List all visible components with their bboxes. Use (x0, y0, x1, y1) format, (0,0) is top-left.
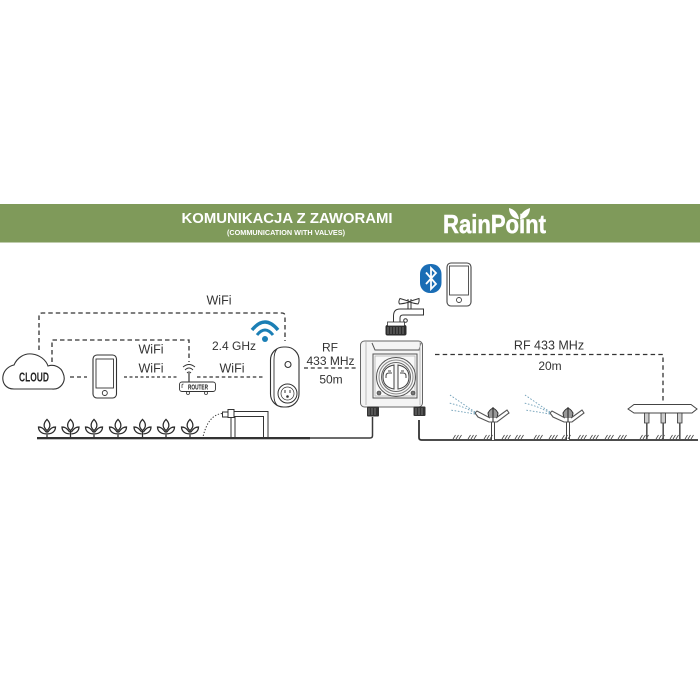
label: 20m: 20m (538, 359, 562, 373)
arrow: cloud to plug WiFi link (39, 313, 285, 350)
sprinkler one (449, 395, 509, 440)
sprinkler two (524, 395, 584, 440)
plants row (38, 419, 198, 437)
icon: cloud: CLOUD (19, 370, 49, 384)
icon: cloud (3, 354, 64, 389)
icon: phone (93, 355, 116, 398)
heading: title: KOMUNIKACJA Z ZAWORAMI (182, 211, 392, 227)
icon: two-way valve body (360, 341, 422, 407)
icon: irrigation stand (203, 410, 268, 438)
icon: right outlet (414, 406, 426, 416)
label: WiFi lower: WiFi (138, 362, 164, 376)
arrow: cloud to phone (70, 376, 87, 378)
label: 2.4 GHz: 2.4 GHz (212, 339, 256, 353)
icon: smart plug (270, 347, 299, 407)
label: RF 433 MHz right: RF 433 MHz (514, 338, 584, 352)
banner (0, 204, 700, 242)
icon: soil sensor (628, 404, 697, 439)
label: top WiFi: WiFi (206, 294, 232, 308)
arrow: valve to sensor RF link (435, 354, 663, 402)
arrow: plug to valve RF link (304, 367, 357, 369)
label: RF: RF (322, 340, 338, 354)
logo: RainPoint: RainPoint (443, 209, 546, 239)
hose: left line (37, 417, 372, 438)
arrow: plug to router (197, 376, 263, 378)
label: 50m: 50m (319, 372, 343, 386)
label: WiFi upper: WiFi (138, 342, 164, 356)
icon: left outlet (367, 406, 379, 416)
label: WiFi right of router: WiFi (220, 362, 244, 376)
icon: router (180, 364, 216, 394)
subtitle: (COMMUNICATION WITH VALVES) (227, 230, 345, 237)
icon: phone with bluetooth (447, 263, 471, 306)
arrow: cloud to router WiFi link (52, 340, 189, 362)
icon: tap (394, 298, 424, 323)
icon: bluetooth badge (420, 264, 442, 293)
icon: blue WiFi (252, 322, 278, 342)
label: 433 MHz: 433 MHz (306, 354, 355, 368)
grass hatching (453, 435, 694, 439)
arrow: router to phone (124, 376, 178, 378)
icon: valve nut (386, 322, 406, 336)
hose: right line (419, 420, 698, 440)
ground: thick section (37, 437, 310, 439)
icon: router: ROUTER (188, 384, 208, 392)
